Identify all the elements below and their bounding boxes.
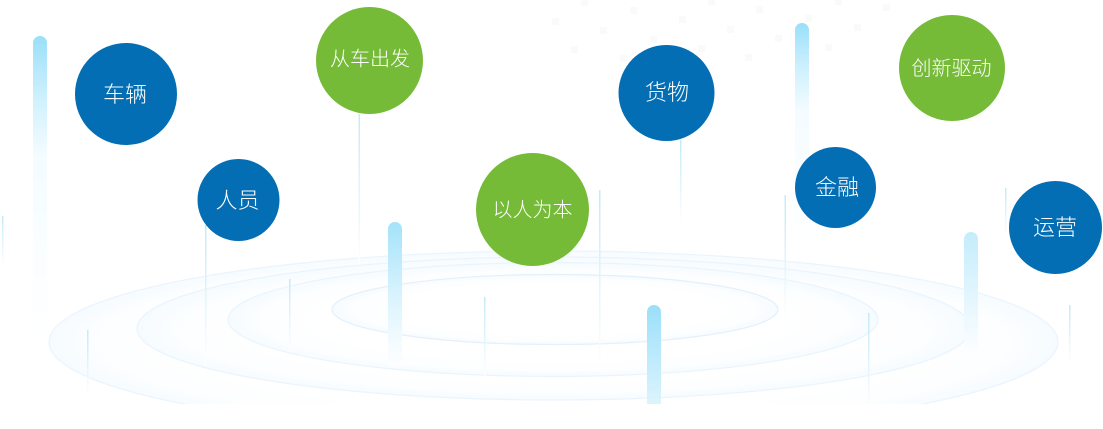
bubble: 创新驱动 [899, 15, 1005, 121]
bubble: 车辆 [75, 43, 177, 145]
bubble: 运营: 运营 [1033, 215, 1077, 240]
bubble: 人员 [198, 159, 280, 241]
bubble: 运营 [1009, 181, 1102, 274]
thick light columns [33, 23, 978, 415]
bubble: 车辆: 车辆 [103, 82, 147, 107]
bubble: 以人为本 [476, 153, 589, 266]
concentric ripple rings [48, 250, 1058, 404]
background dot pattern [552, 0, 890, 62]
bubble: 货物 [618, 45, 714, 141]
thin light lines [2, 114, 1070, 413]
bubble: 以人为本: 以人为本 [492, 198, 572, 222]
bubble: 金融 [795, 147, 876, 228]
bubble: 从车出发 [316, 7, 423, 114]
bubble: 货物: 货物 [645, 80, 689, 105]
bubble: 金融: 金融 [815, 175, 859, 200]
bubble: 人员: 人员 [215, 188, 260, 213]
bubble: 从车出发: 从车出发 [330, 48, 410, 70]
bubble: 创新驱动: 创新驱动 [912, 57, 992, 80]
